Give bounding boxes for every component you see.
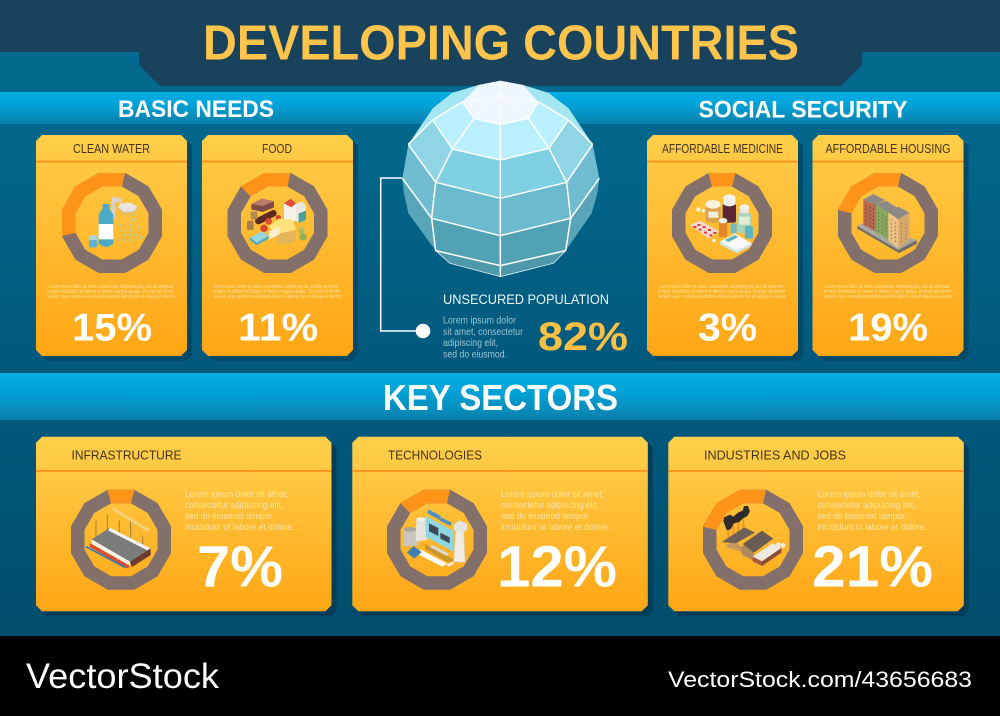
panel: clean water: CLEAN WATER [73,141,150,156]
title: DEVELOPING COUNTRIES [203,16,799,70]
donut: 15 percent [62,173,162,273]
callout: unsecured population [443,292,628,360]
key sectors blue band [0,373,1000,420]
donut: 21 percent [703,490,803,590]
body text: sed do eiusmod tempor [501,511,589,522]
body text [501,489,610,533]
donut: 3 percent [672,173,772,273]
icon: factory [722,506,785,566]
body text: incididunt ut labore et dolore. [501,522,610,533]
callout: unsecured population: UNSECURED POPULATION [443,292,609,307]
small text and percentages: vertical cards: tempor incididunt ut labore et dolore magna aliqua. Ut enim ad minim [658,289,785,295]
percentage: 12% [497,535,617,600]
panel: clean water [36,135,192,361]
panel: affordable housing: AFFORDABLE HOUSING [826,141,950,156]
icon: water bottle and shower [89,197,141,247]
small text and percentages: vertical cards: Lorem ipsum dolor sit amet, consectetur adipiscing elit, sed do eiusmod [49,284,173,290]
body text: consectetur adipiscing elit, [818,500,916,511]
top blue band [0,92,1000,124]
heading: social security: SOCIAL SECURITY [698,96,908,124]
small text and percentages: vertical cards: tempor incididunt ut labore et dolore magna aliqua. Ut enim ad minim [213,289,340,295]
small text and percentages: vertical cards: Lorem ipsum dolor sit amet, consectetur adipiscing elit, sed do eiusmod [659,284,783,290]
callout: unsecured population: Lorem ipsum dolor [443,316,517,326]
footer bar [0,636,1000,716]
footer bar: VectorStock.com/43656683 [668,667,972,692]
panel: industries and jobs [668,437,969,616]
small text and percentages: vertical cards [47,284,952,350]
donut: 19 percent [838,173,938,273]
lower section background [0,420,1000,636]
callout: unsecured population: sed do eiusmod. [443,350,507,360]
panel: technologies [352,437,653,616]
upper teal strip [0,52,1000,92]
donut: 11 percent [228,173,328,273]
callout: unsecured population: adipiscing elit, [443,338,498,349]
donut: 12 percent [387,490,487,590]
panel: affordable medicine [647,135,803,361]
small text and percentages: vertical cards: Lorem ipsum dolor sit amet, consectetur adipiscing elit, sed do eiusmod [825,284,949,290]
heading: basic needs: BASIC NEEDS [118,96,274,123]
small text and percentages: vertical cards: 3% [698,306,757,350]
small text and percentages: vertical cards: tempor incididunt ut labore et dolore magna aliqua. Ut enim ad minim [47,289,174,295]
small text and percentages: vertical cards: 15% [72,306,152,350]
body text: Lorem ipsum dolor sit amet, [818,489,920,500]
callout: unsecured population: 82% [538,315,628,359]
small text and percentages: vertical cards: Lorem ipsum dolor sit amet, consectetur adipiscing elit, sed do eiusmod [214,284,338,290]
small text and percentages: vertical cards: veniam, quis nostrud exercitation ullamco laboris nisi ut aliquip ex eacom [213,294,341,300]
small text and percentages: vertical cards: 19% [848,306,928,350]
body text: consectetur adipiscing elit, [501,500,599,511]
percentage: 7% [197,535,283,600]
icon: medicine bottles [690,194,753,253]
body text [185,489,294,533]
callout: unsecured population: sit amet, consectetur [443,327,524,338]
icon: road with pipes [86,507,151,569]
icon: food assortment [247,199,307,245]
panel: food [202,135,358,361]
body text: incididunt ut labore et dolore. [185,522,294,533]
footer bar: VectorStock [26,657,220,696]
panel: industries and jobs: INDUSTRIES AND JOBS [704,447,846,462]
small text and percentages: vertical cards: veniam, quis nostrud exercitation ullamco laboris nisi ut aliquip ex eacom [47,294,175,300]
panel: infrastructure [36,437,336,616]
body text: incididunt ut labore et dolore. [818,522,926,533]
body text: Lorem ipsum dolor sit amet, [501,489,604,500]
icon: apartment buildings [857,194,917,253]
heading: key sectors: KEY SECTORS [383,377,618,418]
panel: affordable medicine: AFFORDABLE MEDICINE [662,141,783,156]
connector line [381,178,430,338]
panel: infrastructure: INFRASTRUCTURE [72,447,182,462]
small text and percentages: vertical cards: veniam, quis nostrud exercitation ullamco laboris nisi ut aliquip ex eacom [824,294,952,300]
globe [402,81,599,277]
icon: computer and towers [403,509,467,567]
panel: technologies: TECHNOLOGIES [388,447,482,462]
donut: 7 percent [71,490,171,590]
body text: Lorem ipsum dolor sit amet, [185,489,288,500]
small text and percentages: vertical cards: veniam, quis nostrud exercitation ullamco laboris nisi ut aliquip ex eacom [658,294,786,300]
panel: affordable housing [812,135,968,361]
small text and percentages: vertical cards: tempor incididunt ut labore et dolore magna aliqua. Ut enim ad minim [824,289,951,295]
body text: consectetur adipiscing elit, [185,500,283,511]
title banner [0,0,1000,86]
panel: food: FOOD [262,141,292,156]
body text [818,489,926,533]
middle section background [0,124,1000,373]
body text: sed do eiusmod tempor [185,511,273,522]
percentage: 21% [812,535,933,600]
small text and percentages: vertical cards: 11% [238,306,318,350]
body text: sed do eiusmod tempor [818,511,905,522]
